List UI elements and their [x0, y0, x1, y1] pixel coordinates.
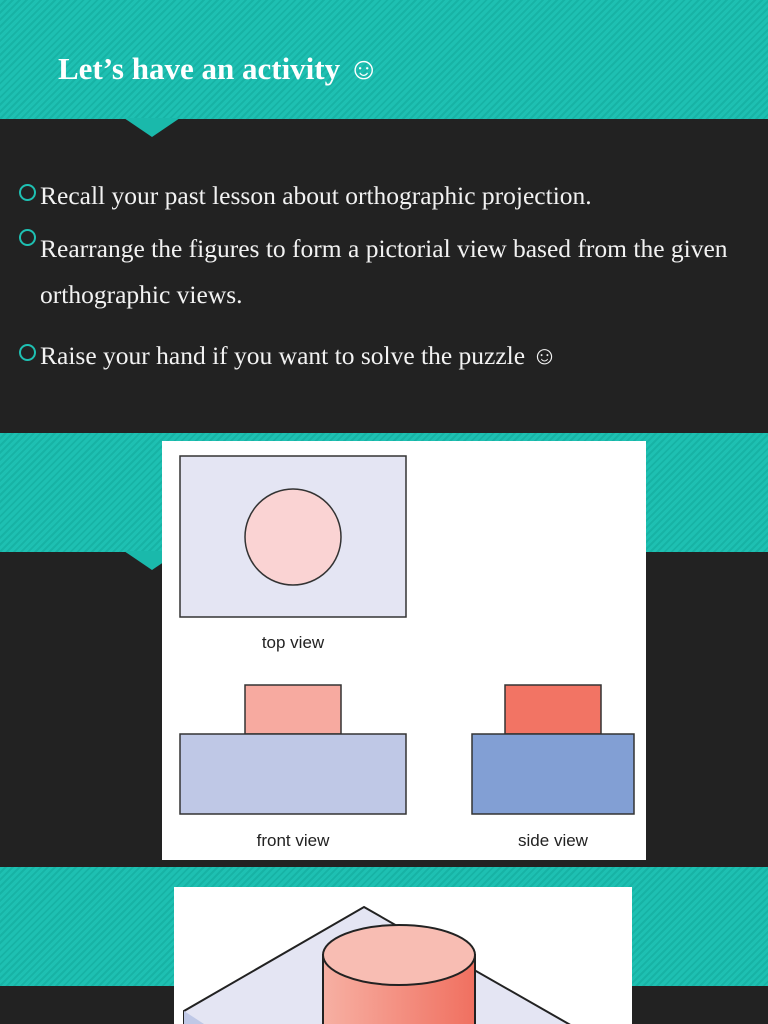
pictorial view image — [174, 887, 632, 1024]
bullet 3: Raise your hand if you want to solve the puzzle ☺ — [40, 341, 558, 370]
slide 3 header band — [0, 867, 768, 986]
header notch — [126, 119, 178, 137]
slide 2 header band — [0, 433, 768, 552]
bullet list — [19, 181, 728, 370]
orthographic views image — [162, 441, 646, 860]
isometric block — [184, 907, 574, 1024]
top view: top view — [262, 633, 325, 652]
bullet 1: Recall your past lesson about orthographic projection. — [40, 181, 592, 210]
side view: side view — [518, 831, 589, 850]
front view: front view — [257, 831, 330, 850]
slide 1 header band — [0, 0, 768, 119]
top view — [180, 456, 406, 652]
bullet 2: Rearrange the figures to form a pictorial view based from the given orthographic views. — [40, 234, 728, 309]
side view — [472, 685, 634, 850]
slide 2 notch — [126, 552, 162, 570]
front view — [180, 685, 406, 850]
title: Let’s have an activity ☺ — [58, 51, 380, 86]
cylinder — [323, 925, 475, 1024]
